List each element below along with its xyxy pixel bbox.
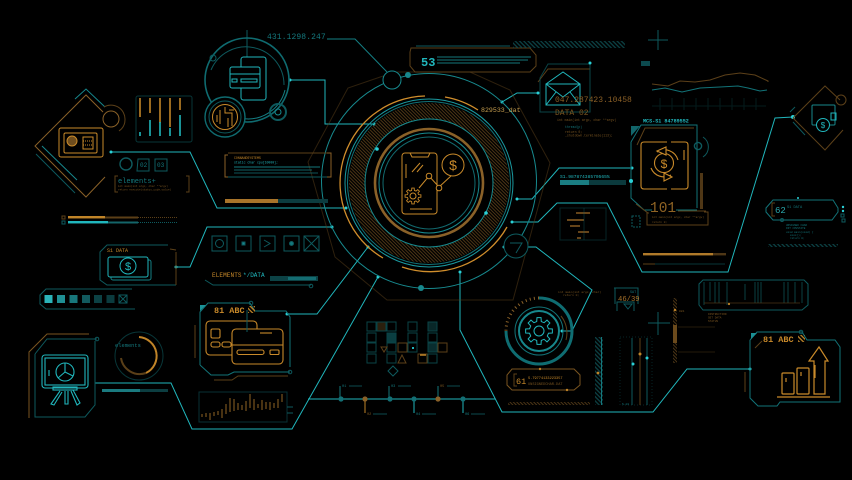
panel: cash icon [100,245,176,285]
panel: money exchange phones: return 0; [652,221,667,224]
panel: elements text block: int main(int argc, char **argv) [118,184,168,188]
panel: credit cards: 81 ABC [214,306,245,316]
panel: elements text block: elements+ [118,178,156,186]
chart: candlesticks [199,392,293,422]
panel: envelope: DATA 02 [555,109,589,118]
timeline [338,385,485,417]
panel: 53 readout [410,41,625,72]
panel: gantt bars [560,208,606,240]
panel: barcode readout: INSTRUCTION [708,313,727,316]
panel: vertical scales: S.01 [622,403,629,406]
panel: 02 03 indicators: 03 [157,162,165,169]
icon: circuit chip [205,97,245,137]
icon: safe [59,128,103,157]
label: 431.1298.247: 431.1298.247 [267,33,326,42]
panel: money exchange phones: int main(int argc, char **argv) [652,215,704,219]
panel: phone and card circle [205,30,289,137]
panel: elements data bar [205,272,318,288]
panel: safe diamond [35,89,125,197]
panel: 61 readout: S.79774133223357 [528,377,563,381]
icon: envelope [546,72,580,105]
icon: small dial [270,104,286,120]
progress bars [62,216,178,224]
panel: wallet diamond [790,86,846,150]
panel: envelope: 047.287423.10458 [555,96,632,105]
panel: 02 03 indicators: 02 [140,162,148,169]
gauge: elements [115,332,163,380]
panel: 02 03 indicators [120,158,167,171]
chart: wave lines [641,30,768,110]
panel: barcode readout: STATUS [708,320,718,323]
panel: growth chart [745,330,840,406]
timeline: 01 [342,385,346,389]
panel: money exchange phones [629,118,708,227]
panel: 61 readout: UNSIGNEDCHAR.DAT [528,383,563,387]
panel: credit cards [195,301,292,380]
icon: banknote: $ [125,261,131,273]
panel: code readout [225,153,331,177]
icon: credit card [230,67,260,88]
gauge: elements: elements [115,343,141,349]
panel: code readout: CONNANDSYSTEMS [234,156,261,160]
panel: fading squares [40,289,135,309]
timeline: 05 [440,385,444,389]
icon: bars with arrow [777,347,830,397]
progress bar teal [102,389,168,392]
icon: gear [526,318,552,344]
panel: envelope: _shutdown.terminate(113); [565,134,613,138]
panel: growth chart: 81 ABC [763,335,794,345]
panel: gear dial: return 0; [563,294,579,297]
panel: gear dial [506,290,601,364]
panel: barcode readout: SET DATA [708,316,722,320]
panel: data grid [367,322,447,376]
panel: 46/39 readout [614,288,640,311]
timeline: 04 [416,413,420,417]
panel: 61 readout [507,368,590,405]
label: S1 percent bar [560,174,626,185]
panel: barcode readout [699,280,808,323]
panel: cash icon: S1 DATA [107,248,128,254]
timeline: 03 [391,385,395,389]
progress bar bottom [643,253,726,264]
panel: 61 readout: 61 [516,377,526,387]
panel: elements text block [115,176,189,192]
panel: presentation [29,334,99,418]
panel: 62 readout [766,197,845,247]
panel: 62 readout: void main(void) { [786,230,814,234]
panel: elements data bar: */DATA [243,272,265,279]
panel: gear dial: int main(int argc, char) [558,290,601,294]
icon: wallet with coin: $ [821,121,826,130]
panel: vertical scales: 081 [679,310,685,313]
panel: elements data bar: ELEMENTS [212,272,242,279]
panel: control icons row [212,236,319,251]
icon: phone with gear, chart and dollar: $ [449,157,457,173]
panel: 62 readout: exec(); [790,233,802,237]
panel: elements text block: return execute(status_code_value) [118,188,172,192]
panel: 46/39 readout: SAT [630,291,636,295]
label: 829533_dat: 829533_dat [481,107,521,114]
panel: 62 readout: S1 DATA [787,206,803,210]
icon: phone with gear, chart and dollar [402,153,464,214]
panel: envelope: thread(p) [565,125,582,129]
icon: phone [241,57,266,100]
panel: sliders [136,96,192,142]
panel: 62 readout: UNSIGNED CHAR [786,224,807,227]
panel: money exchange phones: MCS-S1 84789552 [643,118,689,124]
panel: 62 readout: 62 [775,206,786,216]
central hub rings [308,71,550,300]
progress bar orange [225,199,328,203]
icon: presentation board [42,355,88,405]
icon: exchange phones: $ [661,157,668,171]
timeline: 02 [367,413,371,417]
panel: envelope: return 0; [565,130,582,134]
panel: 53 readout: 53 [421,56,435,70]
panel: 62 readout: return 0; [790,237,805,240]
panel: envelope: int main(int argc, char **argv) [557,118,616,122]
panel: 46/39 readout: 46/39 [618,296,640,304]
panel: code readout: static char cpu[10000]; [234,160,278,164]
panel: vertical scales [595,298,715,406]
icon: credit cards [206,321,283,364]
label: S1 percent bar: S1.98787438570565% [560,174,610,180]
panel: 62 readout: INT CPUSTATE [786,227,806,230]
panel: money exchange phones: 101 [650,201,676,217]
connector lines [95,39,795,429]
timeline: 06 [465,413,469,417]
panel: envelope [538,62,632,138]
